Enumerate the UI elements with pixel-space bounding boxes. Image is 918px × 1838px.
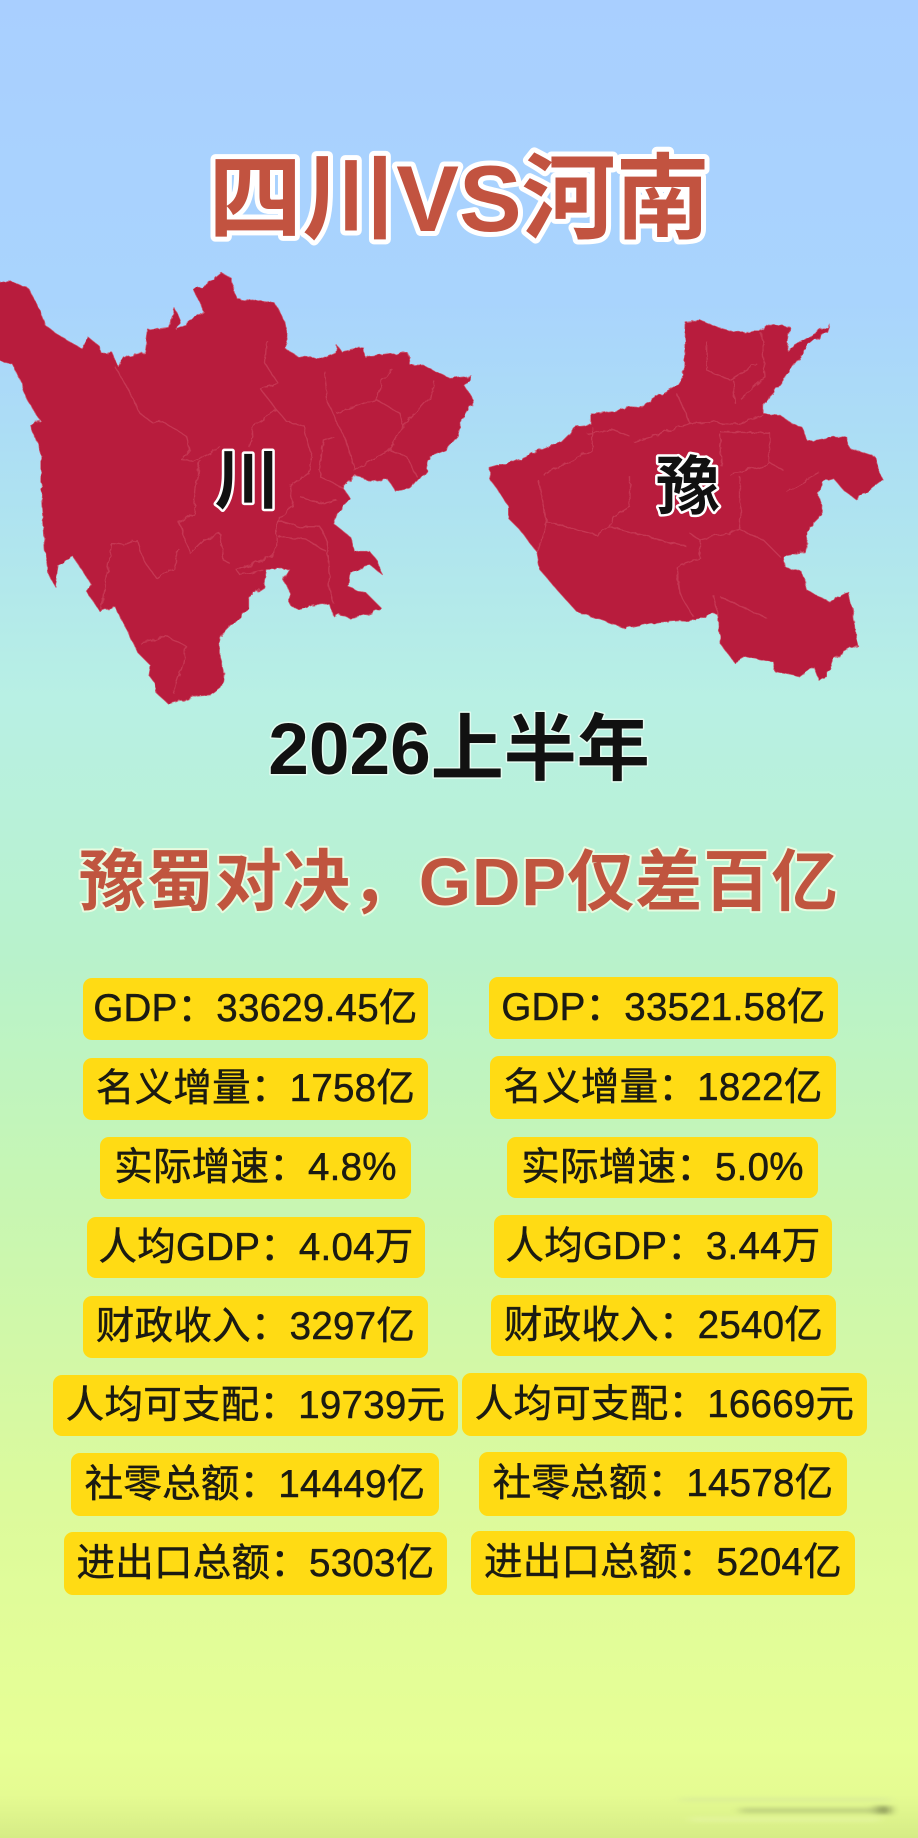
map: Henan (490, 320, 883, 680)
blurred watermark (680, 1798, 890, 1821)
stat: GDP (83, 978, 428, 1040)
stat: nominal increase: 名义增量：1758亿 (96, 1067, 415, 1110)
stat: import and export (471, 1531, 855, 1595)
stat: GDP per capita (87, 1217, 425, 1278)
stat: retail sales: 社零总额：14578亿 (493, 1462, 833, 1505)
stat: GDP per capita (494, 1215, 832, 1278)
stat: real growth: 实际增速：4.8% (114, 1146, 397, 1189)
stat: fiscal revenue: 财政收入：2540亿 (504, 1304, 823, 1346)
stat: import and export (64, 1532, 447, 1595)
stat: real growth (507, 1137, 818, 1198)
stat: disposable income (462, 1373, 867, 1436)
stat: nominal increase: 名义增量：1822亿 (503, 1066, 823, 1108)
stat: retail sales: 社零总额：14449亿 (85, 1462, 425, 1506)
stat: disposable income: 人均可支配：16669元 (475, 1382, 854, 1426)
stat: GDP (489, 977, 838, 1039)
label: 豫: 豫 (656, 451, 720, 523)
stat: retail sales (71, 1453, 439, 1516)
title: 四川VS河南 (208, 146, 710, 251)
stat: real growth: 实际增速：5.0% (521, 1146, 804, 1188)
stat: GDP per capita: 人均GDP：4.04万 (98, 1226, 414, 1268)
stat: GDP: GDP：33521.58亿 (501, 986, 826, 1029)
stat: fiscal revenue (491, 1295, 836, 1356)
stat: fiscal revenue: 财政收入：3297亿 (96, 1305, 415, 1348)
stat: import and export: 进出口总额：5303亿 (77, 1542, 434, 1584)
stat: nominal increase (490, 1056, 836, 1119)
stat: retail sales (479, 1452, 847, 1516)
stat: GDP: GDP：33629.45亿 (93, 987, 418, 1030)
stat: import and export: 进出口总额：5204亿 (484, 1541, 842, 1584)
stat: disposable income (53, 1375, 458, 1436)
stat: GDP per capita: 人均GDP：3.44万 (505, 1224, 821, 1268)
label: 川: 川 (214, 444, 280, 517)
stat: nominal increase (83, 1058, 428, 1120)
Sichuan stats column (53, 978, 458, 1595)
Henan stats column (462, 977, 867, 1595)
headline: 豫蜀对决，GDP仅差百亿 (79, 845, 839, 920)
stat: fiscal revenue (83, 1296, 428, 1358)
stat: disposable income: 人均可支配：19739元 (66, 1384, 445, 1426)
map: Sichuan (0, 273, 473, 704)
period heading: 2026上半年 (268, 709, 650, 790)
stat: real growth (100, 1137, 411, 1199)
